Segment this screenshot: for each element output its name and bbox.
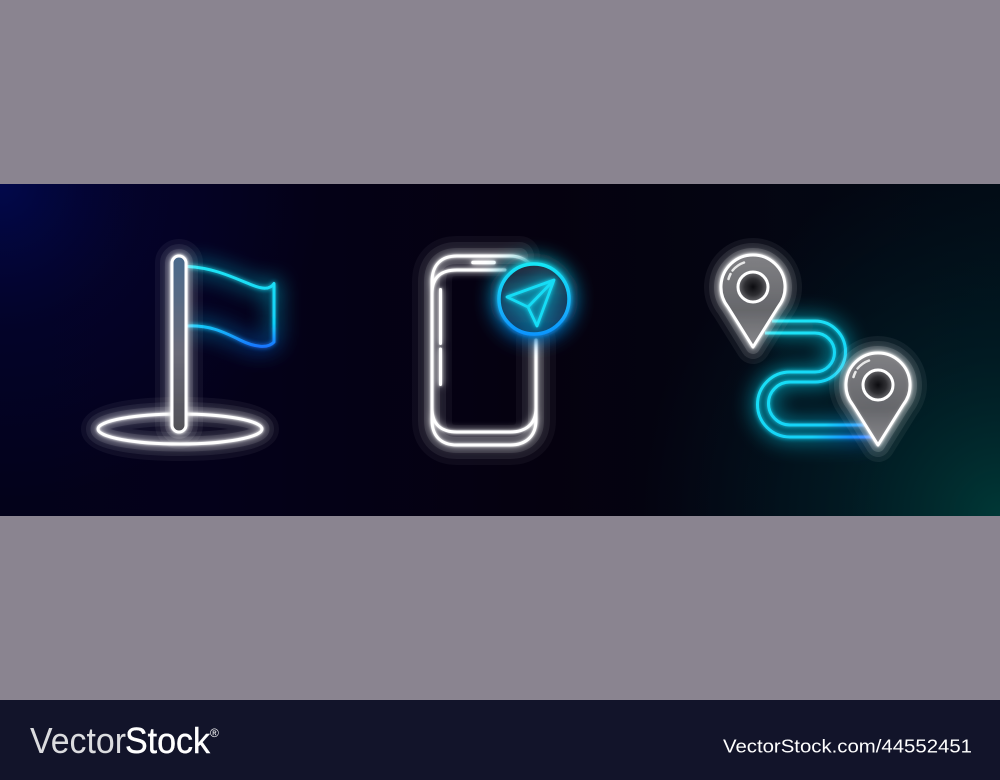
route lines	[758, 321, 874, 437]
navigation badge	[499, 264, 569, 334]
ground ellipse	[98, 414, 262, 444]
icon: smartphone with navigation badge	[432, 256, 569, 445]
flag pole	[172, 256, 186, 432]
end map pin	[846, 353, 910, 445]
footer logo: VectorStock: Stock	[125, 720, 211, 761]
start map pin	[721, 255, 785, 347]
dark neon panel	[0, 184, 1000, 516]
icon: flag on pole	[98, 256, 274, 444]
grey bottom background	[0, 516, 1000, 700]
phone body	[432, 256, 536, 445]
footer bar	[0, 700, 1000, 780]
footer image reference: VectorStock.com/44552451	[723, 736, 972, 756]
flag cloth	[188, 266, 274, 346]
grey top background	[0, 0, 1000, 184]
paper plane arrow	[507, 280, 554, 326]
icon: route between two map pins	[721, 255, 910, 445]
footer logo: VectorStock	[30, 720, 219, 761]
footer logo: VectorStock: Vector	[30, 720, 126, 761]
footer logo: VectorStock: ®	[210, 726, 219, 740]
